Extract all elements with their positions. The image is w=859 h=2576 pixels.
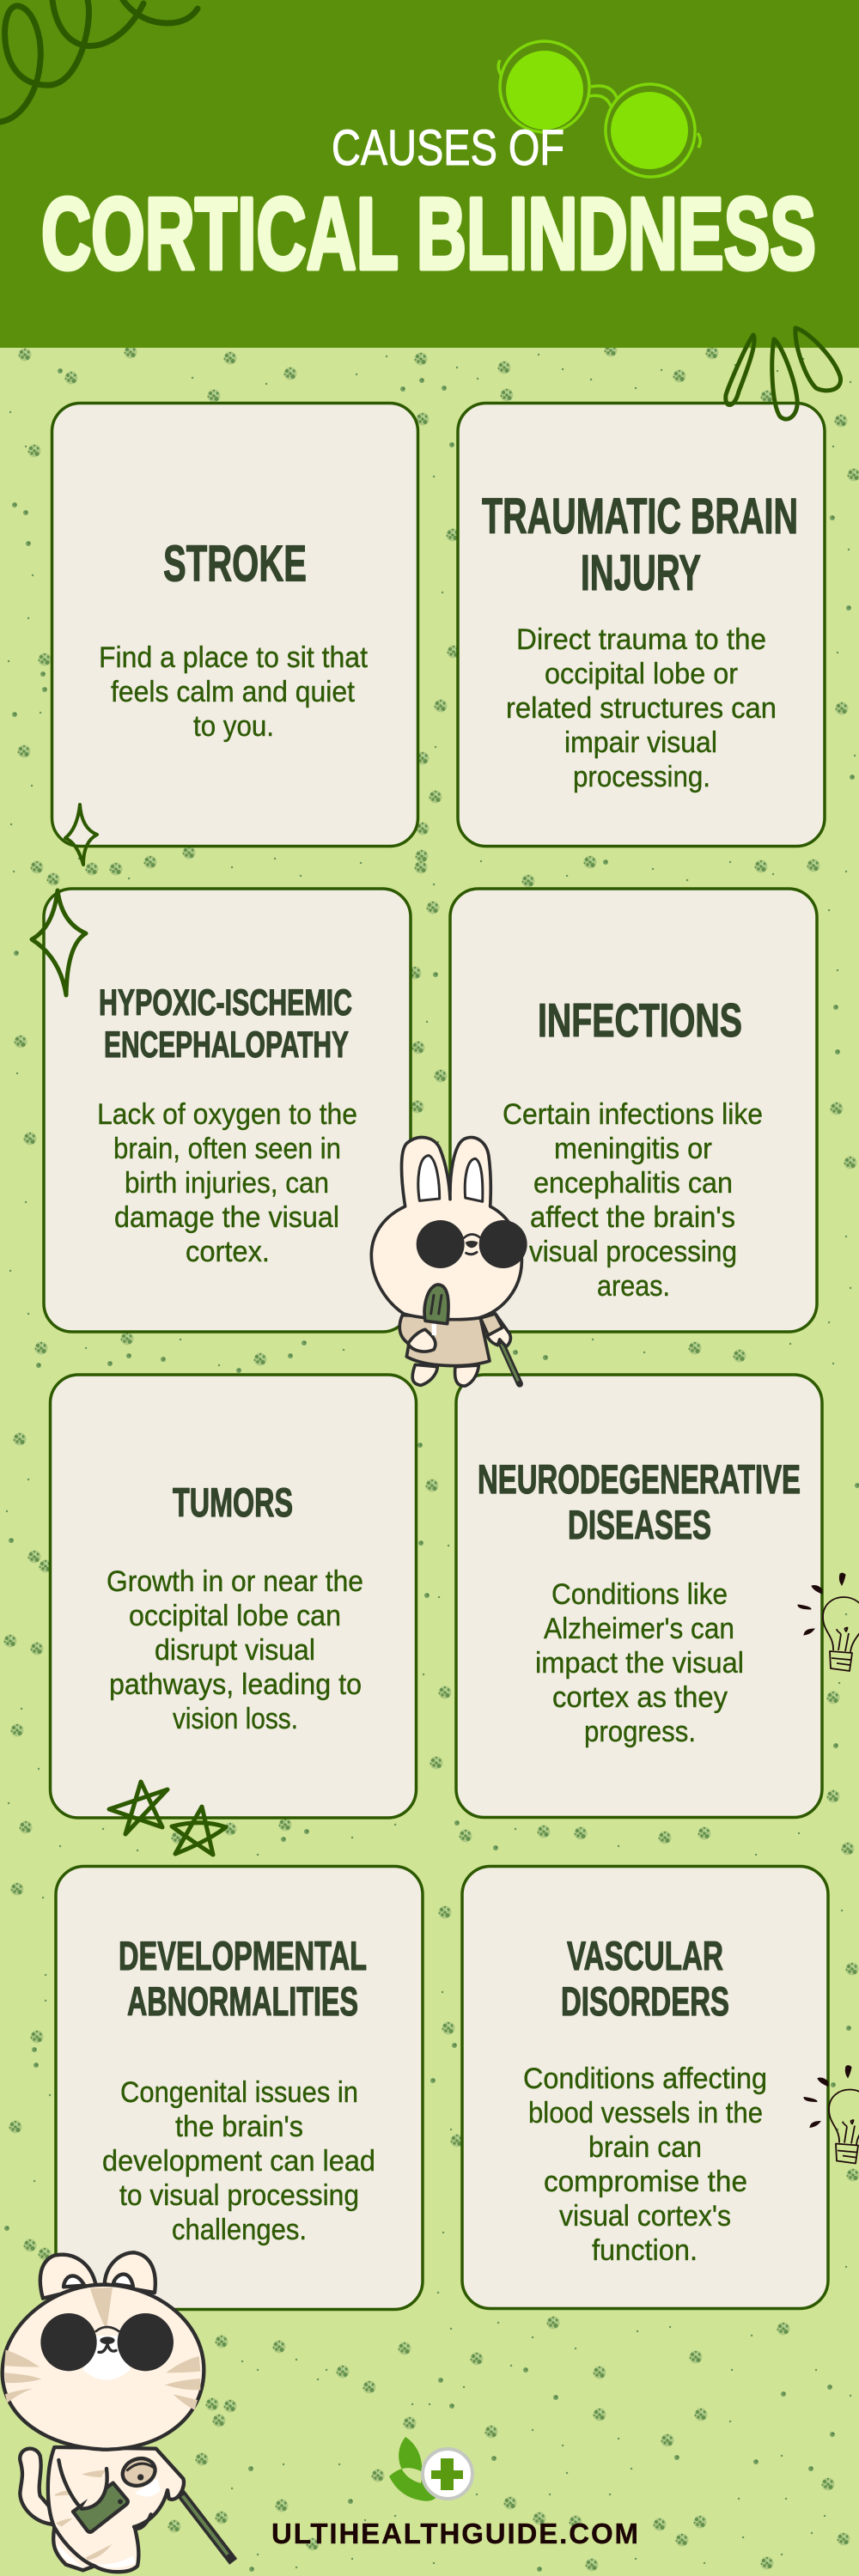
description: the brain's — [175, 2111, 303, 2143]
description — [506, 623, 777, 793]
logo leaves — [389, 2437, 438, 2501]
heading: VASCULAR — [567, 1933, 723, 1978]
heading — [561, 1933, 729, 2024]
description: cortex. — [186, 1236, 270, 1268]
rabbit right hand — [487, 1314, 510, 1346]
description: impair visual — [564, 726, 717, 759]
heading: INFECTIONS — [538, 993, 742, 1047]
description: occipital lobe can — [129, 1600, 341, 1632]
heading — [482, 489, 798, 601]
icon: hand-drawn star right — [172, 1807, 226, 1855]
cat stripes — [4, 2287, 200, 2410]
rabbit dress — [399, 1314, 503, 1366]
rabbit cane — [500, 1340, 520, 1384]
description: Direct trauma to the — [516, 623, 766, 656]
description: brain, often seen in — [113, 1133, 341, 1165]
logo ring — [423, 2449, 472, 2499]
description: Find a place to sit that — [99, 641, 369, 674]
card background — [44, 889, 411, 1332]
panel: traumatic brain injury — [458, 404, 825, 847]
website url: ULTIHEALTHGUIDE.COM — [271, 2518, 638, 2549]
description: birth injuries, can — [125, 1167, 329, 1200]
heading: HYPOXIC-ISCHEMIC — [99, 982, 352, 1024]
character: rabbit with sunglasses — [371, 1138, 527, 1386]
collar bell — [119, 2454, 159, 2490]
description — [503, 1098, 763, 1303]
phone — [73, 2483, 128, 2532]
card background — [56, 1867, 423, 2310]
description: cortex as they — [552, 1681, 728, 1714]
panel: developmental abnormalities — [56, 1867, 423, 2310]
popsicle — [432, 1324, 436, 1335]
panel: neurodegenerative diseases — [456, 1375, 822, 1817]
rabbit head and ears — [371, 1138, 521, 1320]
cat ears — [40, 2252, 155, 2299]
panel: tumors — [50, 1375, 416, 1818]
cat muzzle — [83, 2336, 131, 2380]
description: progress. — [584, 1716, 696, 1748]
description: pathways, leading to — [109, 1668, 362, 1701]
cat head — [3, 2285, 204, 2450]
description — [535, 1578, 744, 1748]
description — [107, 1565, 363, 1735]
description: areas. — [597, 1270, 670, 1303]
icon: small sparkle — [65, 805, 97, 865]
character: cat with sunglasses — [3, 2252, 234, 2572]
description: visual cortex's — [559, 2200, 731, 2233]
description: challenges. — [172, 2214, 307, 2246]
icon: hand-drawn star left — [109, 1782, 168, 1834]
panel: infections — [450, 889, 817, 1332]
icon: green glasses — [494, 35, 701, 183]
description: vision loss. — [173, 1703, 298, 1735]
description: affect the brain's — [530, 1201, 735, 1234]
description: processing. — [573, 761, 710, 793]
panel: vascular disorders — [462, 1867, 828, 2308]
description: to you. — [193, 710, 274, 743]
description — [523, 2063, 767, 2267]
cat cane — [180, 2493, 234, 2561]
description: blood vessels in the — [528, 2097, 763, 2129]
heading: DEVELOPMENTAL — [119, 1933, 367, 1978]
card background — [50, 1375, 416, 1818]
header band — [0, 0, 859, 348]
description — [99, 641, 369, 743]
heading: ABNORMALITIES — [127, 1978, 358, 2024]
description: encephalitis can — [533, 1167, 733, 1200]
icon: three leaves — [726, 328, 841, 419]
rabbit sunglasses — [417, 1220, 527, 1268]
heading: DISEASES — [568, 1502, 711, 1547]
heading: ENCEPHALOPATHY — [104, 1024, 349, 1066]
description: Conditions like — [551, 1578, 728, 1611]
description: function. — [592, 2234, 698, 2267]
card background — [456, 1375, 822, 1817]
rabbit hand — [408, 1329, 436, 1352]
description: Certain infections like — [503, 1098, 763, 1131]
description: Alzheimer's can — [544, 1613, 734, 1645]
panel: hypoxic-ischemic encephalopathy — [44, 889, 411, 1332]
heading — [99, 982, 352, 1066]
description: Lack of oxygen to the — [97, 1098, 357, 1131]
description: related structures can — [506, 692, 777, 725]
description: development can lead — [102, 2145, 375, 2178]
cat tail — [20, 2449, 54, 2524]
title: causes of: CAUSES OF — [332, 120, 564, 176]
heading: TUMORS — [173, 1479, 293, 1525]
logo cross — [431, 2458, 463, 2490]
description: to visual processing — [119, 2179, 359, 2212]
heading: DISORDERS — [561, 1978, 729, 2024]
description — [102, 2076, 375, 2246]
icon: large sparkle — [32, 890, 86, 995]
description: damage the visual — [114, 1201, 339, 1234]
rabbit nose — [466, 1241, 478, 1248]
rabbit legs — [412, 1364, 478, 1386]
description: compromise the — [544, 2166, 747, 2198]
description: occipital lobe or — [545, 658, 738, 690]
description: disrupt visual — [155, 1634, 315, 1667]
cat body — [48, 2447, 184, 2572]
heading: STROKE — [163, 536, 307, 592]
description: visual processing — [529, 1236, 737, 1268]
panel: stroke — [52, 404, 417, 847]
description: Growth in or near the — [107, 1565, 363, 1598]
icon: light bulb lower — [804, 2066, 859, 2164]
icon: squiggle top left — [0, 0, 198, 122]
card background — [52, 404, 417, 847]
description — [97, 1098, 357, 1268]
description: Congenital issues in — [120, 2076, 358, 2109]
card background — [462, 1867, 828, 2308]
description: brain can — [588, 2131, 702, 2164]
heading: INJURY — [581, 545, 701, 601]
description: feels calm and quiet — [111, 676, 356, 708]
description: Conditions affecting — [523, 2063, 767, 2095]
card background — [458, 404, 825, 847]
card background — [450, 889, 817, 1332]
logo: leaf and cross — [389, 2437, 472, 2501]
description: impact the visual — [535, 1647, 744, 1680]
heading — [119, 1933, 367, 2024]
cat sunglasses — [40, 2313, 174, 2371]
heading — [478, 1456, 801, 1547]
icon: light bulb upper — [798, 1573, 859, 1671]
description: meningitis or — [554, 1133, 712, 1165]
cat nose — [100, 2336, 115, 2344]
